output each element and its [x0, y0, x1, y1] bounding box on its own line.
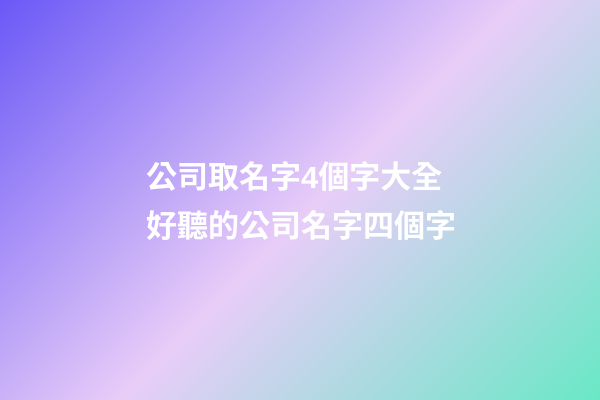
title [146, 160, 456, 244]
title: 好聽的公司名字四個字 [146, 209, 456, 244]
title: 公司取名字4個字大全 [146, 160, 442, 195]
